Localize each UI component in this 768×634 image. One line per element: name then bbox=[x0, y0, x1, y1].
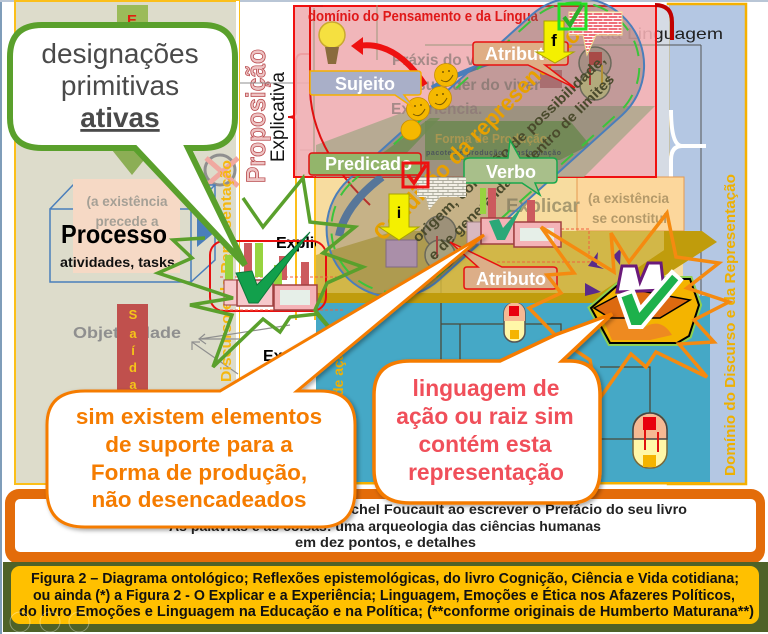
panel: foucault note bbox=[5, 489, 765, 564]
ribbon: blue bbox=[339, 62, 492, 236]
icon: upper small cubes bbox=[504, 302, 525, 342]
panel: figure caption: ou ainda (*) a Figura 2 - O Explicar e a Experiência; Linguagem, Emoções e Ética nos Afazeres Políticos, bbox=[33, 587, 735, 604]
arrow: red curve bbox=[351, 37, 425, 85]
callout: root language: linguagem de bbox=[413, 375, 559, 401]
panel: figure caption: Figura 2 – Diagrama ontológico; Reflexões epistemológicas, do livro Cognição, Ciência e Vida cotidiana; bbox=[31, 571, 739, 587]
callout: support elements: de suporte para a bbox=[105, 432, 293, 457]
icon: yellow arrow i: i bbox=[397, 205, 401, 222]
icon: green check square bbox=[559, 4, 586, 29]
box: verb: Verbo bbox=[486, 162, 536, 182]
callout: active primitive designations: primitivas bbox=[61, 70, 179, 101]
label: action domain: de ação bbox=[330, 344, 346, 396]
text: praxis: No suceder do viver bbox=[392, 77, 540, 94]
panel: foucault note: Michel Foucault ao escrever o Prefácio do seu livro bbox=[335, 502, 687, 517]
panel: tan existence band: Explicar bbox=[506, 196, 581, 217]
text: praxis: Experiência. bbox=[391, 101, 482, 118]
label: process: atividades, tasks bbox=[60, 255, 175, 270]
block: output: d bbox=[129, 360, 137, 375]
viewer controls bbox=[10, 612, 89, 632]
label: language: da Linguagem bbox=[600, 26, 723, 43]
representation capsule bbox=[299, 0, 672, 325]
column lines bbox=[296, 170, 315, 320]
icon: green check bbox=[236, 232, 310, 303]
panel: central white column bbox=[240, 49, 353, 365]
brace: white bbox=[671, 110, 706, 178]
forma de producao arrow bbox=[384, 118, 590, 160]
text: condition of representation: Condição da representação bbox=[368, 22, 585, 245]
label: objectivity: Objetividade bbox=[73, 325, 181, 342]
burst: orange star bbox=[529, 213, 729, 401]
icon: treasure box with check bbox=[585, 248, 699, 343]
icon: small cubes bbox=[633, 413, 667, 468]
forma de producao arrow: pacote de produção transformação bbox=[426, 150, 561, 157]
line bbox=[240, 83, 312, 150]
panel: left process column bbox=[15, 1, 290, 484]
panel: right blue column bbox=[600, 4, 746, 484]
callout: support elements bbox=[47, 235, 484, 527]
label: process bbox=[60, 219, 175, 270]
icon: crossed circle bbox=[205, 155, 238, 186]
panel: foucault note: As palavras e as coisas: uma arqueologia das ciências humanas bbox=[169, 519, 601, 534]
text: praxis bbox=[391, 52, 540, 118]
icon: yellow arrow f bbox=[536, 21, 574, 63]
callout: active primitive designations: ativas bbox=[80, 102, 160, 133]
callout: support elements: sim existem elementos bbox=[76, 404, 322, 429]
block: output: a bbox=[129, 377, 137, 392]
icon: light bulb bbox=[319, 22, 345, 64]
burst: green star bbox=[158, 178, 363, 367]
callout: support elements: Forma de produção, bbox=[91, 460, 307, 485]
arrow: blue bbox=[197, 215, 215, 247]
callout: root language bbox=[374, 314, 612, 503]
callout: root language: contém esta bbox=[418, 431, 552, 457]
box: attribute top bbox=[473, 42, 575, 88]
forma de producao arrow: Forma de Produção bbox=[435, 131, 547, 146]
panel: figure caption bbox=[3, 562, 768, 632]
block: output: a bbox=[129, 326, 137, 341]
icon: teal check bbox=[489, 205, 523, 240]
label: process: Processo bbox=[61, 219, 167, 249]
icon: yellow arrow i bbox=[379, 194, 419, 240]
block: output: S bbox=[129, 307, 138, 322]
label: left vertical domain: Discurso e da Representação bbox=[218, 160, 235, 382]
process cube bbox=[50, 185, 215, 282]
icons: small model bubbles bbox=[386, 47, 611, 270]
box: attribute bottom: Atributo bbox=[476, 269, 546, 289]
block: input: E bbox=[127, 12, 137, 29]
text: praxis: Práxis do viver bbox=[392, 52, 502, 69]
panel: foucault note: em dez pontos, e detalhes bbox=[295, 535, 476, 550]
box: predicate: Predicado bbox=[325, 154, 412, 174]
callout: support elements: não desencadeados bbox=[91, 487, 307, 512]
text: origin: origem, condição de possibilidade, bbox=[409, 52, 609, 245]
box: subject: Sujeito bbox=[335, 74, 395, 94]
note: existence precedes: (a existência bbox=[86, 194, 168, 209]
panel: tan existence band: (a existência bbox=[588, 191, 670, 206]
arc: top red corner bbox=[655, 5, 672, 40]
block: output: í bbox=[131, 343, 135, 358]
label: experience: Experiência bbox=[263, 348, 353, 365]
panel: tan existence band: se constitui bbox=[592, 211, 667, 226]
block: input bbox=[117, 5, 148, 30]
panel: tan existence band bbox=[316, 177, 684, 297]
arrows: grey bbox=[192, 325, 290, 374]
block: output bbox=[117, 304, 148, 394]
box: subject bbox=[310, 71, 421, 108]
callout: active primitive designations bbox=[10, 25, 245, 265]
arrow: input down bbox=[112, 150, 152, 175]
icon: red check square bbox=[403, 163, 428, 187]
icon: white brick note bbox=[417, 177, 466, 210]
panel: teal action domain bbox=[316, 275, 710, 484]
label: vertical domain: Domínio do Discurso e da Representação bbox=[722, 174, 739, 476]
box: attribute top: Atributo bbox=[485, 44, 555, 64]
label: domain title: domínio do Pensamento e da Língua bbox=[308, 8, 539, 25]
box: verb bbox=[464, 140, 557, 195]
brace: red bbox=[288, 54, 310, 170]
callout: root language: representação bbox=[408, 459, 564, 485]
diagram: mini models bbox=[210, 188, 589, 311]
label: explain: Explicar bbox=[276, 235, 338, 252]
panel: thought and language domain bbox=[294, 5, 672, 205]
text: generality: e de generalidade dentro de limites bbox=[425, 71, 617, 263]
note: existence precedes bbox=[73, 179, 180, 273]
panel: figure caption: do livro Emoções e Linguagem na Educação e na Política; (**conforme originais de Humberto Maturana**) bbox=[19, 604, 754, 620]
platform: gold bbox=[316, 231, 717, 303]
label: proposition: Proposição bbox=[241, 49, 271, 183]
icon: yellow arrow f: f bbox=[551, 31, 557, 50]
label: explanatory: Explicativa bbox=[268, 72, 289, 162]
note: existence precedes: precede a bbox=[95, 214, 159, 229]
icons: smileys bbox=[401, 64, 458, 140]
callout: root language: ação ou raiz sim bbox=[396, 403, 574, 429]
icon: pink brick note bbox=[569, 12, 622, 55]
box: attribute bottom bbox=[450, 242, 557, 289]
callout: active primitive designations: designações bbox=[41, 38, 199, 69]
